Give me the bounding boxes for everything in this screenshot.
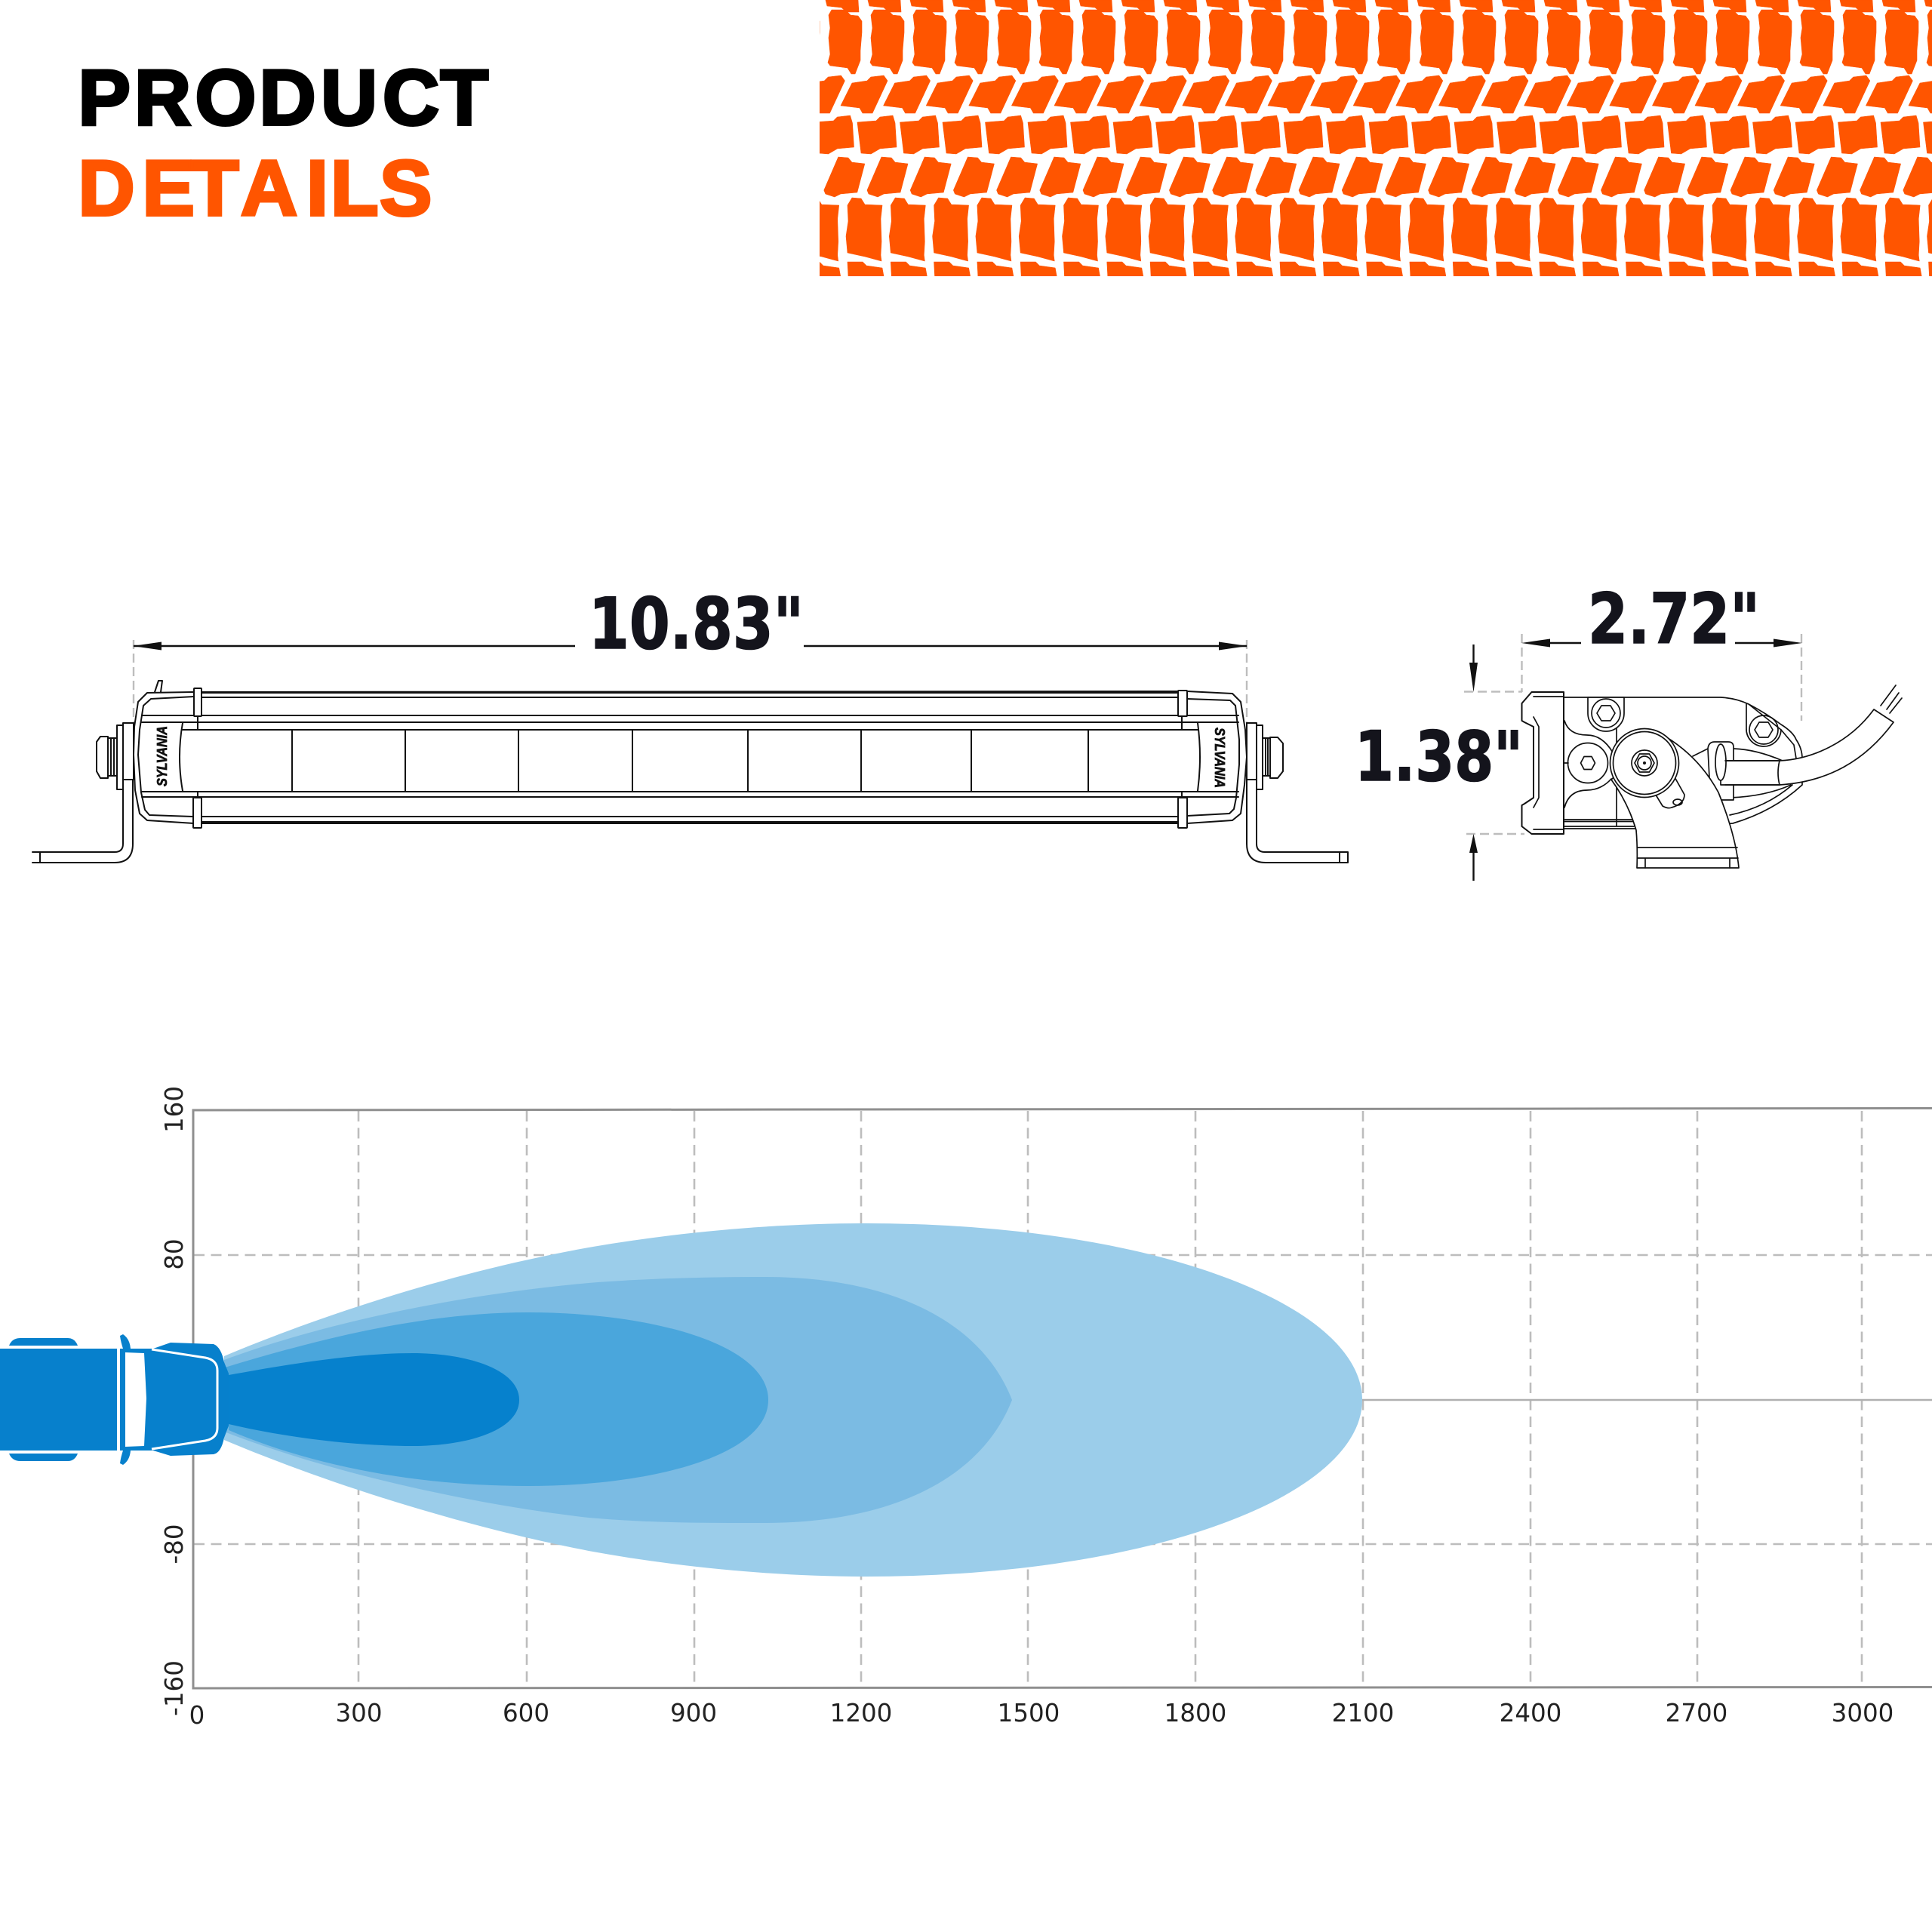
height dimension arrows bbox=[1469, 645, 1478, 881]
led dividers bbox=[292, 730, 1088, 792]
beam zone: third bbox=[225, 1312, 768, 1486]
right bolt bbox=[1746, 703, 1781, 746]
x axis labels: 1800 bbox=[1164, 1699, 1226, 1727]
light bar housing bbox=[134, 681, 1247, 828]
x axis labels: 2100 bbox=[1332, 1699, 1394, 1727]
guide lines bbox=[134, 640, 1247, 723]
pivot and mount arm bbox=[1611, 729, 1739, 868]
housing body bbox=[1564, 697, 1802, 829]
x axis labels: 300 bbox=[335, 1699, 383, 1727]
y axis labels: -160 bbox=[160, 1660, 189, 1716]
windshield bbox=[125, 1352, 146, 1447]
center line bbox=[1362, 1399, 1932, 1401]
axes frame bbox=[193, 1108, 1932, 1688]
icon: truck bbox=[0, 1334, 229, 1465]
y axis labels: 160 bbox=[160, 1086, 189, 1133]
beam zone: outer bbox=[224, 1223, 1362, 1577]
title bbox=[78, 54, 488, 232]
width dimension label: 10.83" bbox=[589, 583, 804, 666]
cable bbox=[1708, 685, 1902, 800]
x axis labels: 2700 bbox=[1666, 1699, 1727, 1727]
y axis labels: -80 bbox=[160, 1524, 189, 1564]
middle bolt bbox=[1564, 743, 1607, 783]
cab bbox=[120, 1343, 229, 1456]
depth dimension label: 2.72" bbox=[1588, 579, 1760, 660]
logo left: SYLVANIA bbox=[155, 726, 170, 786]
x axis labels: 2400 bbox=[1500, 1699, 1561, 1727]
side guide lines bbox=[1464, 634, 1801, 834]
cab outline bbox=[152, 1349, 217, 1449]
tire tread pattern bbox=[783, 0, 1932, 276]
left mounting bracket bbox=[32, 723, 134, 863]
clamps bbox=[194, 688, 202, 716]
right mounting bracket bbox=[1247, 723, 1348, 863]
title line: details: DETAILS bbox=[78, 145, 432, 232]
height dimension label: 1.38" bbox=[1355, 718, 1523, 797]
x axis labels: 1200 bbox=[830, 1699, 892, 1727]
logo right: SYLVANIA bbox=[1212, 728, 1227, 788]
title line: product: PRODUCT bbox=[78, 54, 488, 142]
y axis labels: 80 bbox=[160, 1238, 189, 1270]
beam pattern chart bbox=[0, 1086, 1932, 1730]
upper bolt bbox=[1588, 697, 1624, 731]
x axis labels: 600 bbox=[503, 1699, 549, 1727]
depth dimension arrow bbox=[1521, 638, 1802, 648]
beam zone: center bbox=[229, 1353, 519, 1446]
beam zone: second bbox=[224, 1277, 1012, 1523]
side view drawing bbox=[1355, 579, 1902, 881]
wheels bbox=[9, 1338, 78, 1346]
x axis labels: 900 bbox=[670, 1699, 717, 1727]
front view light bar drawing bbox=[32, 583, 1348, 863]
x axis labels: 0 bbox=[189, 1701, 205, 1730]
mirrors bbox=[120, 1334, 131, 1349]
x axis labels bbox=[189, 1699, 1894, 1730]
x axis labels: 1500 bbox=[998, 1699, 1060, 1727]
trailer bbox=[0, 1349, 117, 1451]
grid bbox=[194, 1111, 1932, 1687]
x axis labels: 3000 bbox=[1832, 1699, 1894, 1727]
width dimension arrow bbox=[133, 641, 1247, 651]
y axis labels bbox=[160, 1086, 189, 1716]
end cap bbox=[1521, 692, 1564, 834]
